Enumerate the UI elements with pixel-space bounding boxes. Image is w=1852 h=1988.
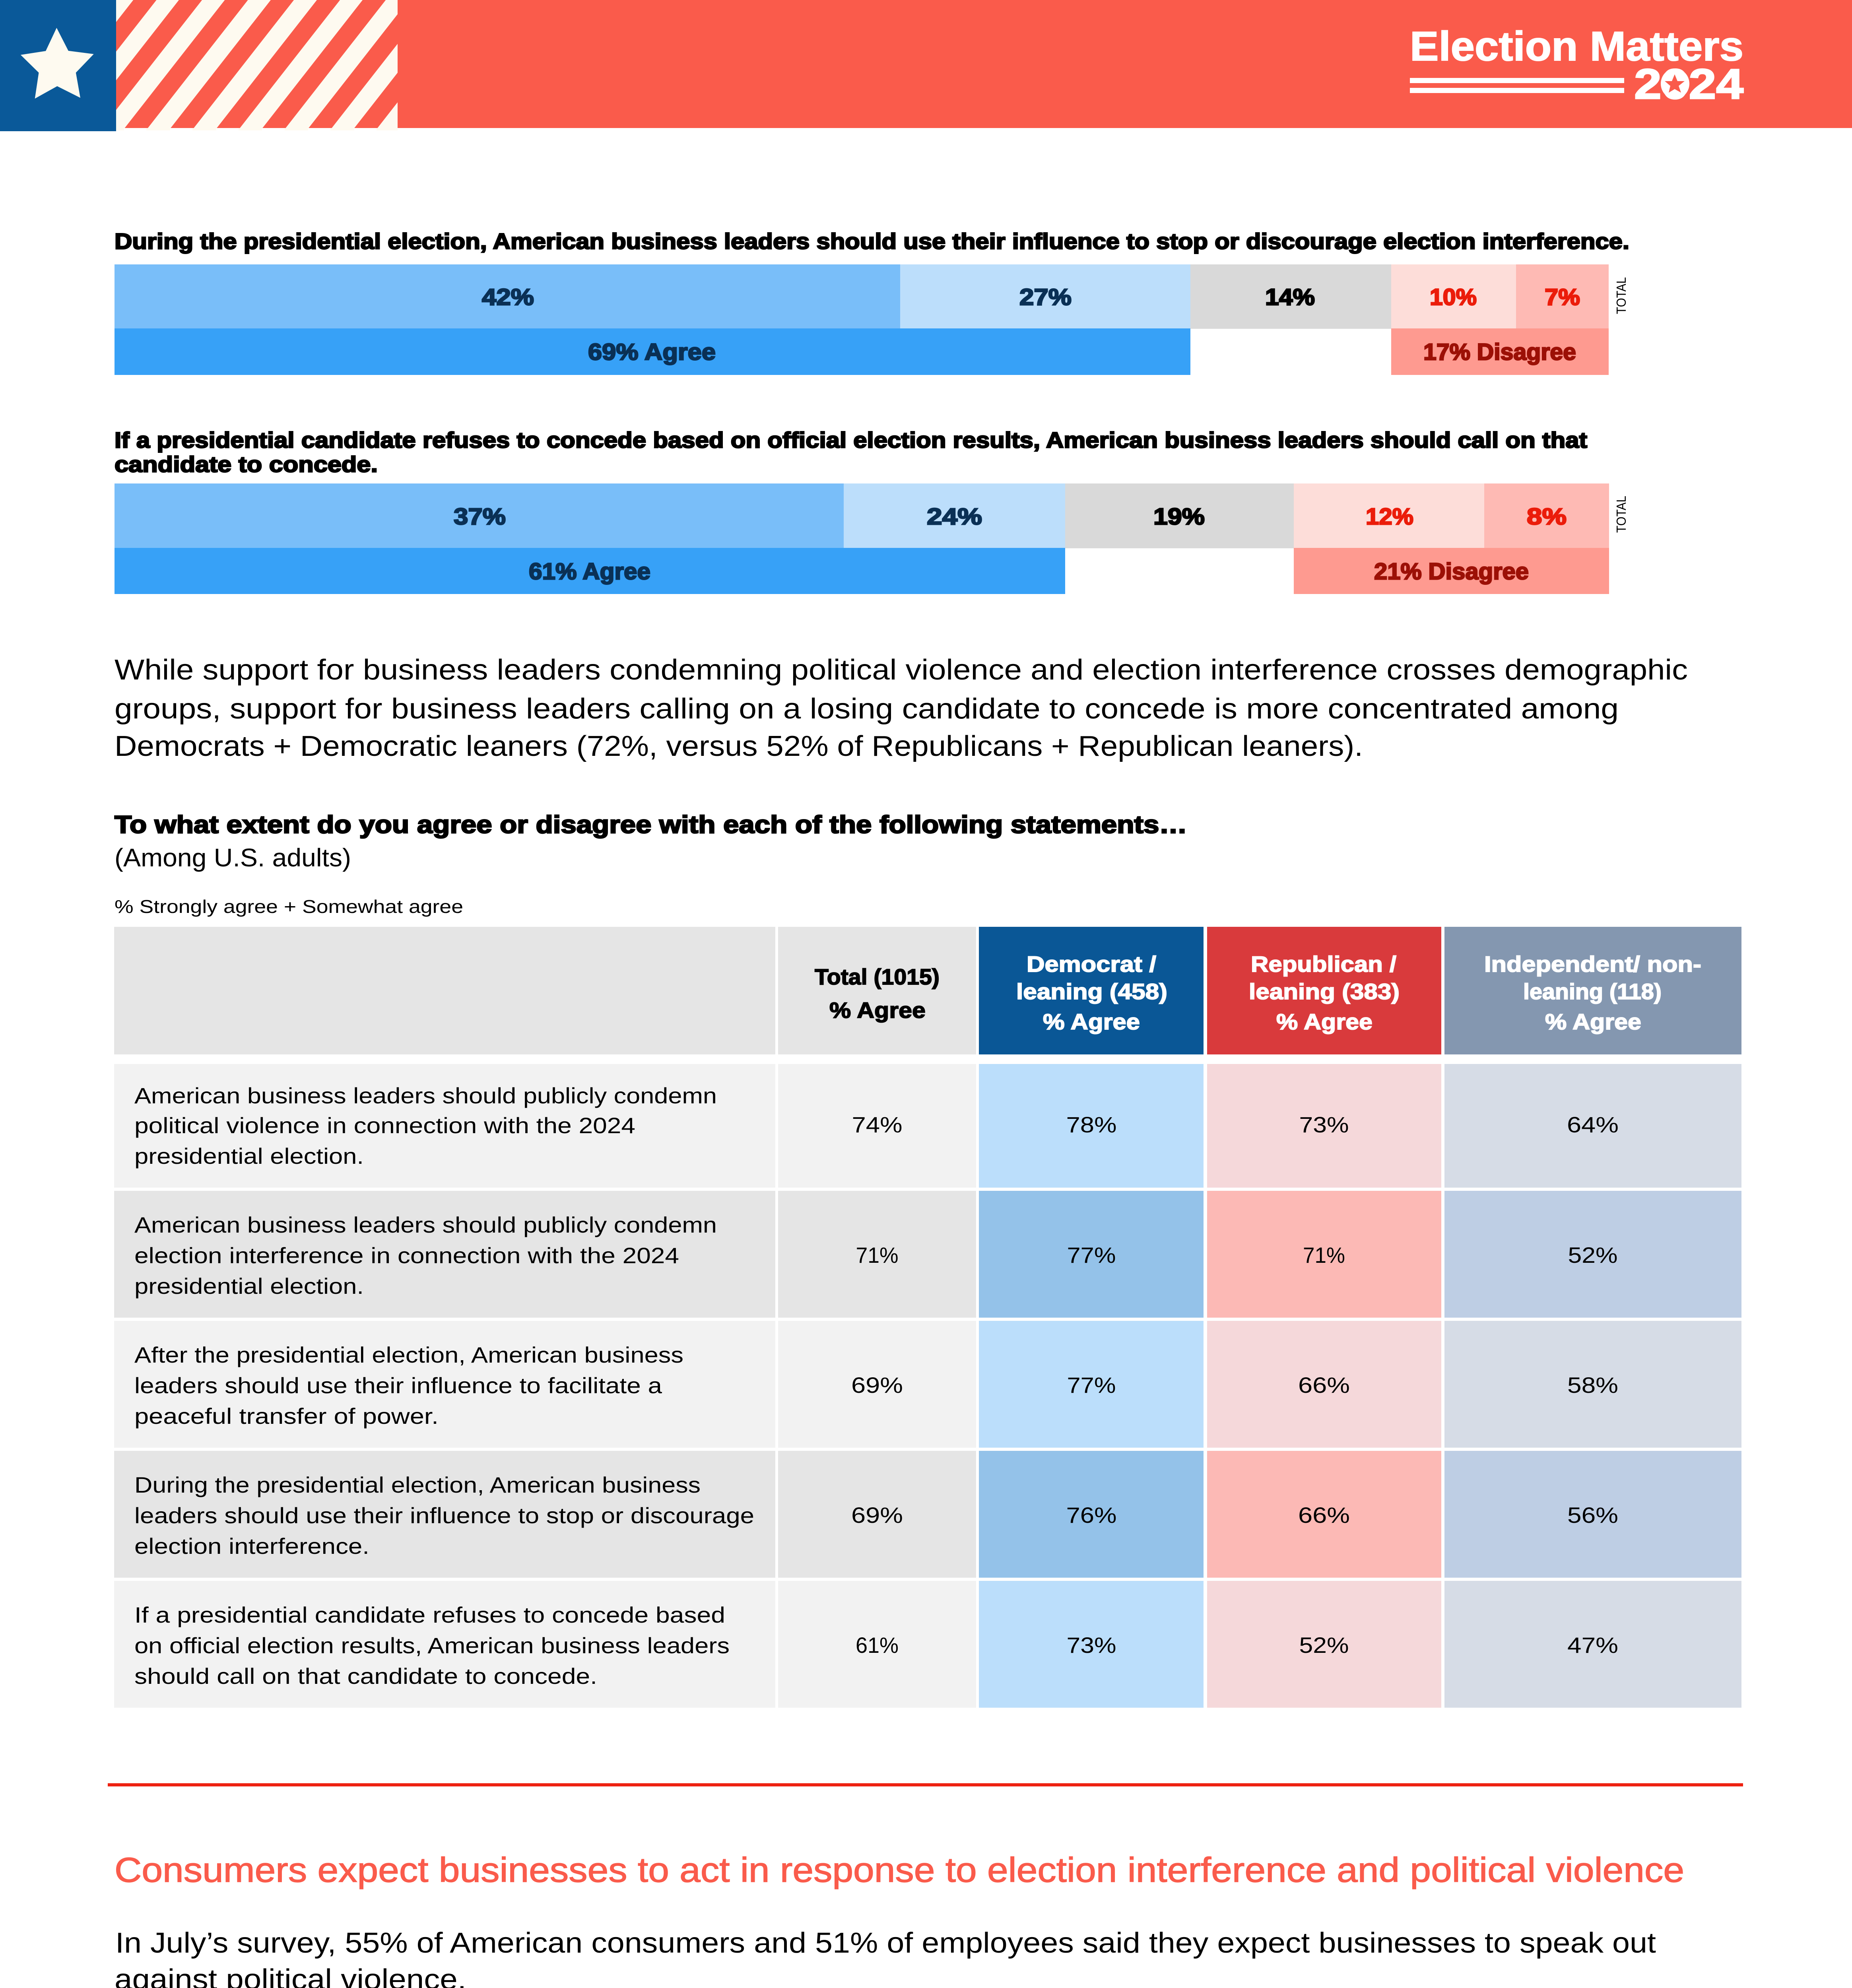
- logo: Election Matters 2024: [1410, 23, 1743, 108]
- text block: demographics paragraph: Democrats + Democratic leaners (72%, versus 52% of Republicans + Republican leaners).: [115, 730, 1363, 762]
- heading: chart 2 question: If a presidential candidate refuses to concede based on official election results, American business leaders should call on that: [115, 427, 1587, 452]
- label: total: TOTAL: [1614, 496, 1629, 533]
- column header: republican: leaning (383): [1249, 979, 1400, 1004]
- table row 4: 66%: [1298, 1503, 1350, 1528]
- logo: Election Matters 2024: 2024: [1634, 60, 1743, 108]
- table row 4: [114, 1451, 1741, 1578]
- text: base note: (Among U.S. adults): [115, 843, 351, 872]
- table: agreement by party: [114, 927, 1741, 1708]
- column header: democrat: Democrat /: [1027, 951, 1156, 977]
- summary bar: agree: [115, 548, 1065, 594]
- table row 5: [114, 1581, 1741, 1708]
- stacked bar: total responses: 24%: [927, 504, 982, 530]
- column header: democrat: % Agree: [1043, 1009, 1140, 1034]
- column header: democrat: [979, 927, 1204, 1054]
- table row 1: 78%: [1066, 1112, 1116, 1137]
- stacked bar: total responses: 7%: [1545, 284, 1580, 310]
- table row 2: 71%: [1303, 1242, 1345, 1268]
- stacked bar: total responses: 37%: [454, 504, 506, 530]
- table row 5: If a presidential candidate refuses to concede based: [134, 1602, 725, 1627]
- table row 3: peaceful transfer of power.: [134, 1404, 439, 1429]
- table row 4: During the presidential election, American business: [134, 1472, 701, 1497]
- table row 2: 71%: [856, 1242, 899, 1268]
- table row 4: election interference.: [134, 1534, 369, 1559]
- table row 3: leaders should use their influence to facilitate a: [134, 1373, 662, 1398]
- heading: chart 2 question: candidate to concede.: [115, 452, 378, 477]
- table row 5: on official election results, American business leaders: [134, 1633, 730, 1658]
- heading: chart 1 question: During the presidential election, American business leaders should use their influence to stop or discourage election interference.: [115, 229, 1629, 254]
- text block: demographics paragraph: While support for business leaders condemning political violence and election interference crosses demographic: [115, 654, 1688, 686]
- column header: independent: Independent/ non-: [1484, 951, 1701, 977]
- chart: stop election interference: [115, 229, 1629, 375]
- table row 1: [114, 1064, 1741, 1188]
- table row 2: American business leaders should publicly condemn: [134, 1212, 717, 1237]
- summary bar: disagree: [1391, 328, 1609, 375]
- table row 3: After the presidential election, American business: [134, 1342, 683, 1367]
- column header: republican: [1207, 927, 1441, 1054]
- table row 3: [114, 1321, 1741, 1448]
- summary bar: agree: 61% Agree: [529, 559, 650, 584]
- table row 4: 69%: [851, 1503, 903, 1528]
- table row 5: 52%: [1299, 1633, 1349, 1658]
- table row 5: 73%: [1066, 1633, 1116, 1658]
- column header: democrat: leaning (458): [1016, 979, 1167, 1004]
- chart: call on candidate to concede: [115, 427, 1629, 594]
- column header: republican: % Agree: [1276, 1009, 1372, 1034]
- table row 4: 56%: [1567, 1503, 1618, 1528]
- table row 1: 74%: [852, 1112, 903, 1137]
- stacked bar: total responses: 12%: [1366, 504, 1413, 530]
- table row 3: 66%: [1298, 1373, 1350, 1398]
- table row 5: 47%: [1567, 1633, 1618, 1658]
- column header: total: % Agree: [829, 998, 926, 1023]
- text block: demographics paragraph: groups, support for business leaders calling on a losing candidate to concede is more concentrated among: [115, 693, 1619, 725]
- column header: total: [778, 927, 976, 1054]
- stacked bar: total responses: 27%: [1019, 284, 1072, 310]
- table row 3: 58%: [1567, 1373, 1618, 1398]
- stacked bar: total responses: 19%: [1153, 504, 1205, 530]
- table row 4: leaders should use their influence to stop or discourage: [134, 1503, 754, 1528]
- stacked bar: total responses: 14%: [1265, 284, 1315, 310]
- table row 2: election interference in connection with the 2024: [134, 1243, 679, 1268]
- text block: demographics paragraph: [115, 654, 1688, 762]
- table row 1: 64%: [1567, 1112, 1619, 1137]
- text: metric note: % Strongly agree + Somewhat agree: [115, 896, 463, 917]
- summary bar: agree: 69% Agree: [588, 339, 716, 365]
- table row 4: 76%: [1066, 1503, 1116, 1528]
- column header: independent: leaning (118): [1523, 979, 1662, 1004]
- table row 1: political violence in connection with the 2024: [134, 1113, 635, 1138]
- stacked bar: total responses: [115, 264, 1609, 329]
- panel: blue star block: [0, 0, 116, 131]
- table row 3: 69%: [851, 1373, 903, 1398]
- stacked bar: total responses: 42%: [482, 284, 534, 310]
- stacked bar: total responses: 8%: [1527, 504, 1567, 530]
- label: total: TOTAL: [1614, 277, 1629, 314]
- table row 1: American business leaders should publicly condemn: [134, 1083, 717, 1108]
- summary bar: agree: [115, 328, 1190, 375]
- column header: independent: % Agree: [1545, 1009, 1641, 1034]
- stacked bar: total responses: 10%: [1430, 284, 1477, 310]
- column header: total: Total (1015): [815, 964, 940, 989]
- heading: chart 2 question: [115, 427, 1587, 477]
- column header: republican: Republican /: [1251, 951, 1396, 977]
- heading: table question: [115, 811, 1187, 872]
- column header: independent: [1444, 927, 1741, 1054]
- summary bar: disagree: 17% Disagree: [1423, 339, 1576, 365]
- heading: table question: To what extent do you agree or disagree with each of the following statements…: [115, 811, 1187, 839]
- table row 2: 77%: [1067, 1242, 1116, 1268]
- table row 1: presidential election.: [134, 1143, 364, 1169]
- table header row: [114, 927, 1741, 1054]
- icon: star: [21, 28, 94, 99]
- table row 5: 61%: [856, 1633, 899, 1658]
- summary bar: disagree: 21% Disagree: [1374, 559, 1529, 584]
- diagonal stripes: [116, 0, 398, 130]
- table row 1: 73%: [1299, 1112, 1349, 1137]
- table row 3: 77%: [1067, 1373, 1116, 1398]
- table row 5: should call on that candidate to concede.: [134, 1664, 597, 1689]
- table row 2: 52%: [1568, 1242, 1617, 1268]
- heading: consumers expect action: Consumers expect businesses to act in response to election interference and political violence: [115, 1851, 1684, 1889]
- logo: Election Matters 2024: Election Matters: [1410, 23, 1743, 70]
- summary bar: disagree: [1294, 548, 1609, 594]
- header banner: [0, 0, 1852, 131]
- text block: July survey: In July’s survey, 55% of American consumers and 51% of employees said they expect businesses to speak out: [115, 1927, 1656, 1959]
- table row 2: [114, 1191, 1741, 1318]
- stacked bar: total responses: [115, 483, 1609, 548]
- text block: July survey: [115, 1927, 1656, 1988]
- table row 2: presidential election.: [134, 1274, 364, 1299]
